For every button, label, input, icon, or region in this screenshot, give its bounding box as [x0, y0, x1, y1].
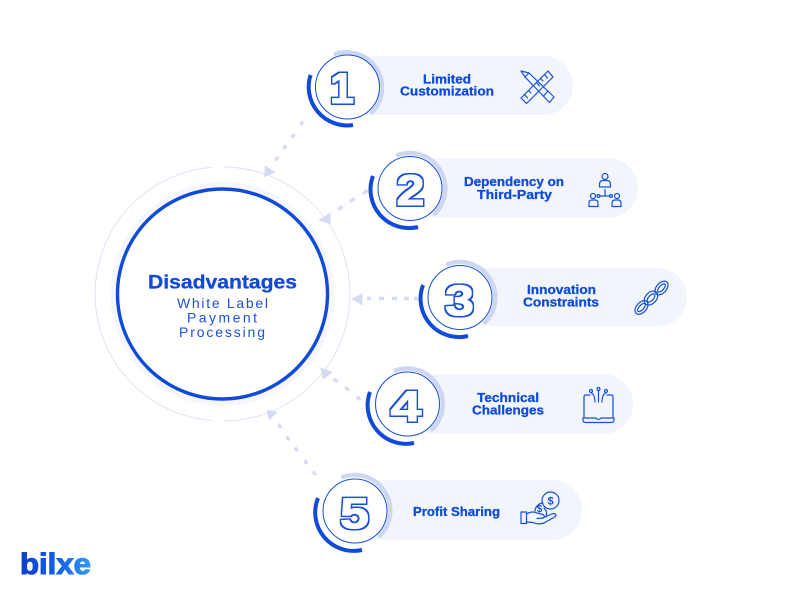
- label 4: Technical: [477, 390, 539, 405]
- item 4: Technical Challenges: [368, 368, 633, 444]
- label 4: [472, 390, 544, 418]
- heading: Disadvantages: Disadvantages: [148, 272, 297, 294]
- label 1: Limited: [423, 72, 471, 86]
- icon: laptop with circuit: [583, 388, 614, 422]
- pill 3: [457, 268, 687, 326]
- label 5: Profit Sharing: [413, 504, 500, 519]
- number badge 2: [371, 153, 445, 228]
- subheading: White Label Payment Processing: Processing: [179, 324, 265, 340]
- number badge 2: 2: [396, 167, 424, 215]
- icon: hand with coins: [521, 492, 559, 524]
- label 3: Innovation: [527, 282, 596, 297]
- arrow: item 4 to centre: [320, 368, 360, 400]
- subheading: White Label Payment Processing: White Label: [177, 295, 268, 311]
- icon: chain: [632, 279, 671, 317]
- arrow: item 5 to centre: [266, 410, 316, 475]
- icon: pencil and ruler: [521, 71, 554, 104]
- number badge 5: [315, 475, 390, 551]
- number badge 3: 3: [445, 277, 474, 325]
- number badge 1: 1: [330, 65, 354, 113]
- pill 5: [352, 480, 582, 540]
- label 3: Constraints: [523, 295, 599, 310]
- label 2: Third-Party: [477, 187, 553, 202]
- central circle: [95, 167, 350, 421]
- item 2: Dependency on Third-Party: [371, 153, 638, 228]
- pill 2: [407, 158, 638, 218]
- number badge 3: [421, 262, 495, 337]
- arrow: item 1 to centre: [264, 122, 303, 178]
- subheading: White Label Payment Processing: [177, 295, 268, 340]
- arrow: item 3 to centre: [352, 293, 418, 306]
- pill 1: [345, 56, 573, 115]
- number badge 4: 4: [390, 383, 422, 431]
- label 3: [523, 282, 599, 310]
- item 1: Limited Customization: [309, 52, 573, 125]
- icon: hand with coins: $: [547, 496, 554, 508]
- subheading: White Label Payment Processing: Payment: [187, 310, 257, 326]
- number badge 4: [368, 368, 443, 444]
- number badge 1: [309, 52, 382, 125]
- label 2: [464, 174, 564, 202]
- arrow: item 2 to centre: [318, 190, 368, 224]
- number badge 5: 5: [340, 490, 369, 538]
- label 1: [400, 72, 494, 99]
- label 4: Challenges: [472, 402, 544, 418]
- label 2: Dependency on: [464, 174, 564, 189]
- icon: people network: [589, 174, 621, 206]
- item 5: Profit Sharing: [315, 475, 582, 551]
- pill 4: [405, 374, 633, 434]
- item 3: Innovation Constraints: [421, 262, 687, 337]
- logo: bilxe: bilxe: [20, 548, 91, 581]
- icon: hand with coins: $: [537, 504, 543, 515]
- label 1: Customization: [400, 84, 494, 99]
